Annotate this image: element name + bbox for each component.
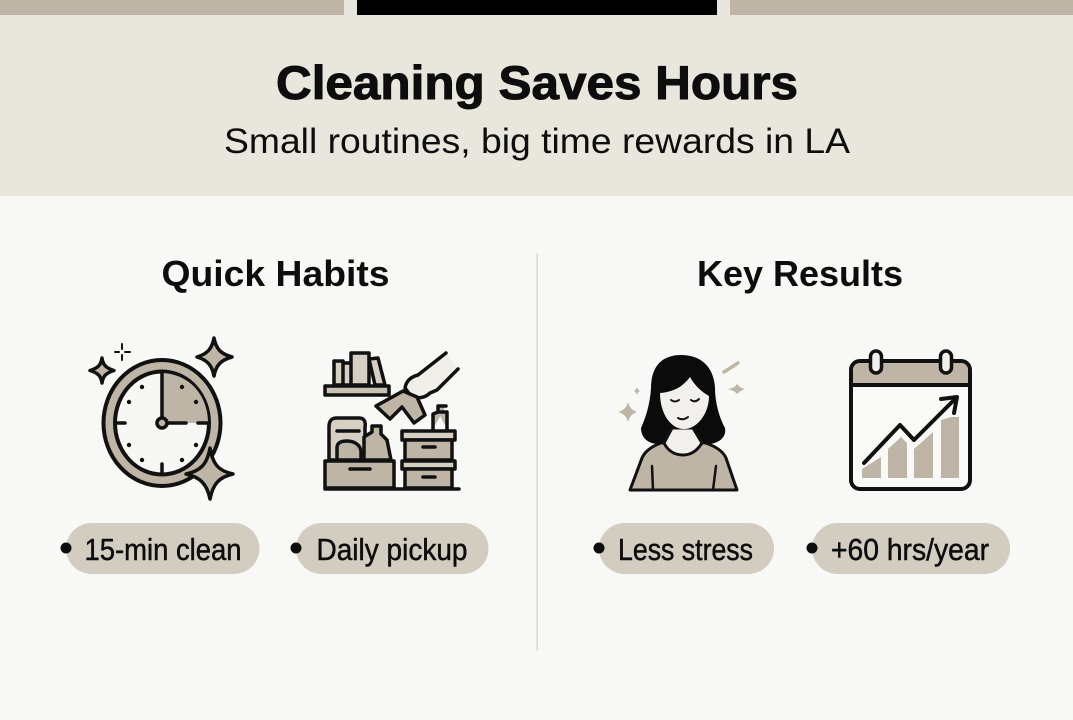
pill: 15-min clean xyxy=(60,523,260,574)
pill: Daily pickup: Daily pickup xyxy=(316,532,468,567)
subtitle: Small routines, big time rewards in LA xyxy=(224,122,851,161)
pill: Less stress: Less stress xyxy=(618,532,753,567)
pill: 15-min clean: 15-min clean xyxy=(84,532,242,567)
pill: +60 hrs/year: +60 hrs/year xyxy=(831,532,989,567)
icon: calendar with rising chart xyxy=(851,351,970,489)
title: Cleaning Saves Hours xyxy=(276,56,798,109)
center divider xyxy=(536,253,538,651)
pill: +60 hrs/year xyxy=(806,523,1010,574)
pill: Daily pickup xyxy=(290,523,488,574)
icon: tidying shelf and storage boxes xyxy=(325,353,459,489)
icon: clock with sparkles xyxy=(90,338,233,499)
icon: calm woman xyxy=(618,355,745,490)
heading: Quick Habits: Quick Habits xyxy=(162,253,390,294)
pill: Less stress xyxy=(594,523,774,574)
header band xyxy=(0,0,1073,196)
heading: Key Results: Key Results xyxy=(697,253,903,294)
